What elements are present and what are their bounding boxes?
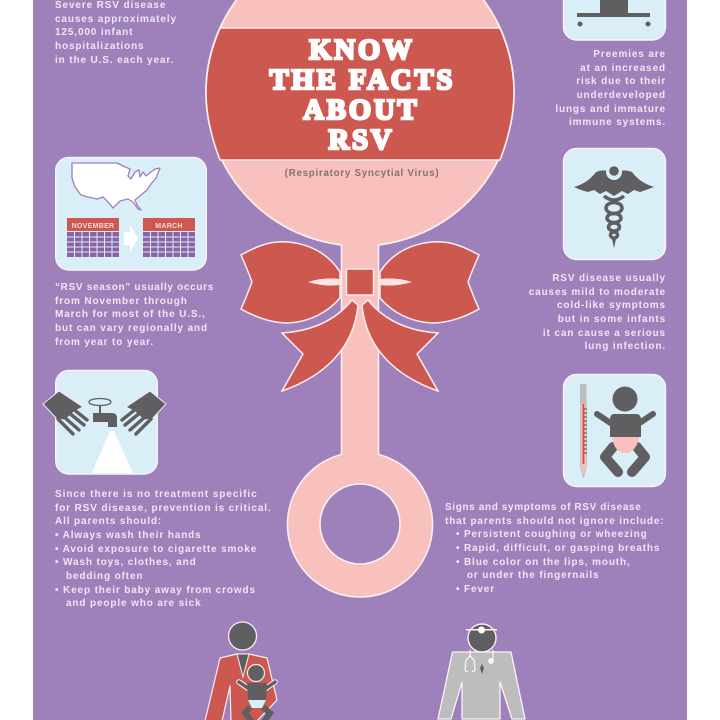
US map [72,163,160,210]
thermometer [580,384,587,478]
calendar: November: NOVEMBER [72,223,114,230]
title: RSV [328,125,395,156]
text: hospitalizations: Severe RSV disease causes approximately 125,000 infant hospitalizations in the U.S. each year. [55,0,177,66]
tie [480,664,484,674]
title: ABOUT [303,95,420,126]
title [270,35,455,156]
text: prevention list: Since there is no treatment specific for RSV disease, prevention is critical. All parents should: • Always wash their hands • Avoid exposure to cigarette smoke • Wash toys, clothes, and bedding often • Keep their baby away from crowds and people who are sick [55,489,272,609]
baby [597,386,653,472]
calendar: March: MARCH [155,223,183,230]
text: preemies: Preemies are at an increased risk due to their underdeveloped lungs and immature immune systems. [555,49,666,128]
text: RSV season: “RSV season” usually occurs from November through March for most of the U.S., but can vary regionally and from year to year. [55,282,214,348]
baby held [239,664,275,720]
arrow [124,225,138,252]
icon: baby and thermometer [564,374,666,486]
stethoscope [465,650,493,671]
icon: map and calendars [56,158,206,270]
subtitle: (Respiratory Syncytial Virus) [285,168,439,179]
faucet [89,398,117,427]
right hand [122,391,166,434]
head mirror [466,626,497,634]
text: symptoms summary: RSV disease usually causes mild to moderate cold-like symptoms but in some infants it can cause a serious lung infection. [529,273,666,352]
water [92,431,133,473]
rattle handle and ring [288,225,433,597]
title: KNOW [309,35,415,66]
title: THE FACTS [270,65,455,96]
icon: hand washing [43,370,166,474]
bow [241,242,479,391]
figure: doctor [438,624,525,719]
text: signs and symptoms list: Signs and symptoms of RSV disease that parents should not ignore include: • Persistent coughing or wheezing • Rapid, difficult, or gasping breaths • Blue color on the lips, mouth, or under the fingernails • Fever [445,502,664,595]
calendar: November [67,218,119,257]
icon: caduceus [564,148,666,260]
calendar: March [143,218,195,257]
left hand [43,391,87,434]
figure: parent holding baby [205,622,277,720]
rattle [206,0,514,597]
rattle head [206,0,514,250]
icon: preemie incubator [564,0,666,40]
